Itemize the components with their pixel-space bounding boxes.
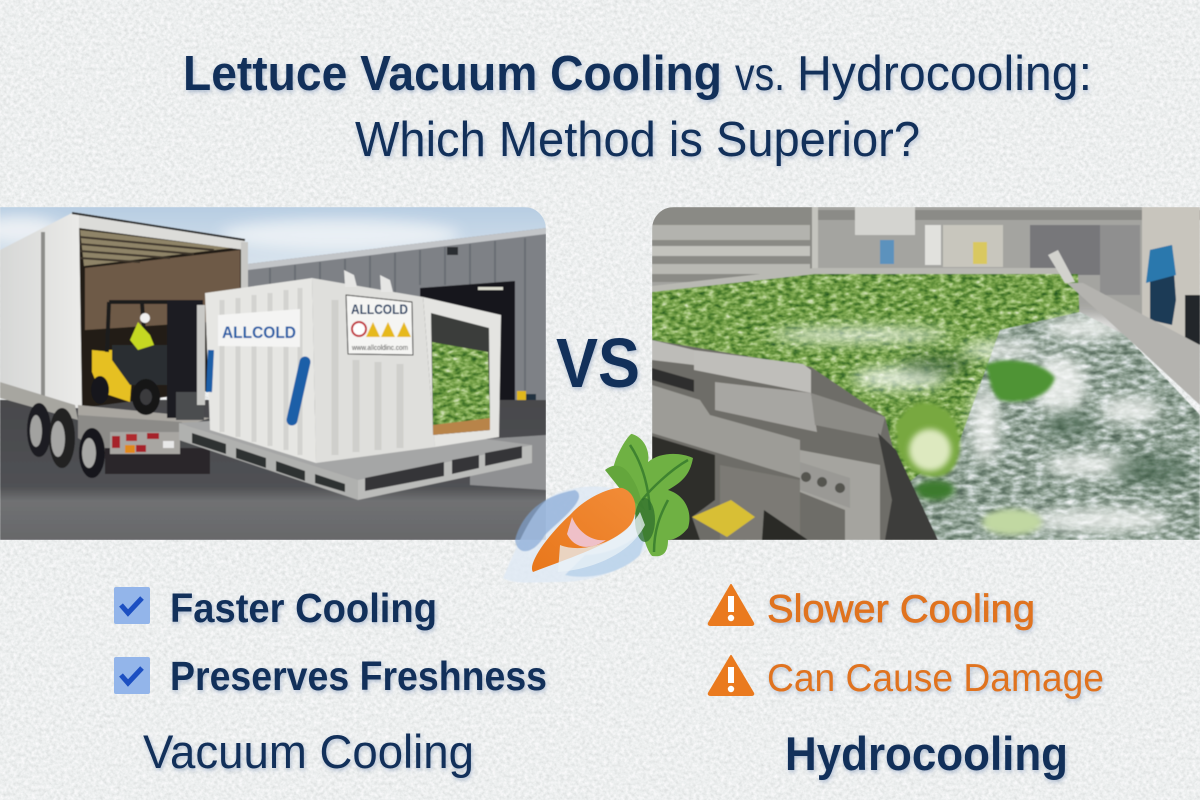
warning sign	[346, 295, 413, 355]
leafy carrot top	[605, 434, 693, 556]
title: Lettuce Vacuum Cooling	[183, 47, 722, 101]
dark green water patches	[900, 355, 1190, 486]
lettuce heads in water	[895, 360, 1055, 535]
truck rear bumper and lights	[78, 415, 210, 474]
warning icon	[709, 656, 753, 695]
checkbox icon	[114, 657, 150, 694]
asphalt ground	[0, 400, 546, 540]
rushing water	[900, 312, 1200, 540]
photo: vacuum cooler unloaded from a truck	[0, 207, 546, 540]
right side chute wall	[1048, 250, 1200, 405]
benefit: faster cooling: Faster Cooling	[170, 585, 437, 631]
warning sign: www.allcoldinc.com	[351, 345, 408, 352]
label: hydrocooling: Hydrocooling	[785, 727, 1068, 780]
pallet platform	[179, 415, 532, 500]
water splash	[503, 486, 655, 583]
vacuum cooler container	[205, 270, 501, 463]
carrot body	[532, 488, 636, 572]
hydrocooling drawbacks	[709, 585, 1104, 700]
truck wheels	[27, 403, 105, 478]
title: Which Method is Superior?	[355, 113, 920, 167]
foam highlights	[770, 317, 1170, 532]
truck trailer	[0, 213, 248, 428]
ALLCOLD label panel	[218, 309, 300, 347]
benefit: preserves freshness: Preserves Freshness	[170, 653, 547, 699]
lettuce bed	[652, 274, 1080, 500]
stainless machine frame	[652, 340, 938, 540]
VS badge text: VS	[556, 324, 640, 402]
vacuum cooling benefits	[114, 585, 547, 699]
label: vacuum cooling: Vacuum Cooling	[143, 725, 474, 778]
forklift	[91, 300, 205, 420]
ALLCOLD label panel: ALLCOLD	[222, 323, 296, 342]
warehouse building	[247, 228, 546, 401]
sky	[0, 207, 546, 264]
factory background	[652, 207, 1200, 345]
title: vs.	[735, 48, 785, 100]
blue cylinders	[292, 362, 305, 420]
carrot with water splash	[503, 434, 693, 583]
title: Hydrocooling:	[797, 47, 1092, 101]
drawback: slower cooling: Slower Cooling	[767, 588, 1035, 631]
container lifting lugs	[344, 270, 393, 292]
warning sign: ALLCOLD	[351, 301, 408, 317]
photo: hydrocooling wash line	[652, 207, 1200, 540]
title	[183, 47, 1092, 167]
drawback: can cause damage: Can Cause Damage	[767, 657, 1104, 700]
checkbox icon	[114, 587, 150, 624]
warning icon	[709, 585, 753, 625]
